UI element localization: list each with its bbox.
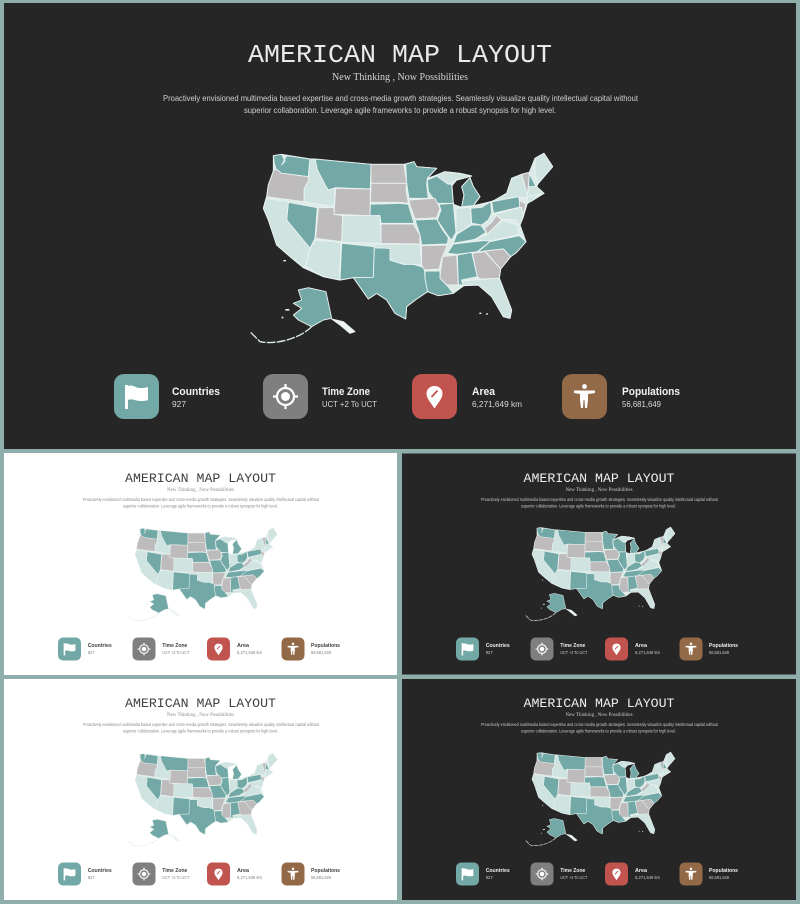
stat: time zone: UCT +2 To UCT <box>162 650 190 655</box>
stat: area: Area <box>237 643 250 649</box>
body text: superior collaboration. Leverage agile frameworks to provide a robust synopsis for high level. <box>123 504 278 508</box>
stat: countries: 927 <box>486 875 493 880</box>
stat: area <box>412 374 522 419</box>
stat: area: Area <box>237 868 250 874</box>
stat: time zone <box>530 862 588 886</box>
stat: area <box>207 862 262 886</box>
stat: time zone: Time Zone <box>162 868 187 874</box>
stat: time zone <box>132 862 190 886</box>
body text: Proactively envisioned multimedia based expertise and cross-media growth strategies. Seamlessly visualize quality intellectual capital without <box>163 93 639 103</box>
stat: populations <box>282 862 340 886</box>
stat: countries <box>58 638 112 660</box>
panel: dark slide top <box>402 454 796 674</box>
stat: area: 6,271,649 km <box>237 650 262 655</box>
subtitle: New Thinking , Now Possibilities <box>167 487 234 493</box>
stat: countries: Countries <box>172 386 220 398</box>
panel: white slide bottom <box>4 679 397 900</box>
body text <box>163 93 639 115</box>
stat: populations: 56,681,649 <box>709 650 730 655</box>
stat: populations: Populations <box>709 643 738 649</box>
stat: time zone: Time Zone <box>560 643 585 649</box>
subtitle: New Thinking , Now Possibilities <box>566 712 632 718</box>
stat: countries: Countries <box>88 868 112 874</box>
stat: populations <box>282 638 340 660</box>
map: United States <box>128 753 277 846</box>
stat: area: 6,271,649 km <box>635 875 660 880</box>
body text: Proactively envisioned multimedia based expertise and cross-media growth strategies. Seamlessly visualize quality intellectual capital without <box>481 497 719 502</box>
title: AMERICAN MAP LAYOUT <box>524 696 675 711</box>
subtitle: New Thinking , Now Possibilities <box>167 712 234 718</box>
body text: Proactively envisioned multimedia based expertise and cross-media growth strategies. Seamlessly visualize quality intellectual capital without <box>83 722 320 727</box>
title: AMERICAN MAP LAYOUT <box>125 471 276 486</box>
stat: countries: Countries <box>88 643 112 649</box>
stat: area <box>605 638 660 660</box>
stat: area: 6,271,649 km <box>237 875 262 880</box>
stat: populations: 56,681,649 <box>622 399 661 409</box>
panel: white slide top <box>4 453 397 675</box>
panel: dark slide bottom <box>402 679 796 900</box>
subtitle: New Thinking , Now Possibilities <box>566 487 632 493</box>
stat: area: Area <box>472 386 496 398</box>
stat: populations <box>680 638 738 660</box>
stat: populations: 56,681,649 <box>311 875 332 880</box>
stat: time zone: UCT +2 To UCT <box>560 875 588 880</box>
stat: countries: Countries <box>486 643 510 649</box>
stat: countries <box>58 862 112 886</box>
stat: populations: Populations <box>311 868 340 874</box>
panel: main dark slide <box>4 3 796 449</box>
stat: time zone <box>263 374 377 419</box>
stat: time zone: UCT +2 To UCT <box>560 650 588 655</box>
title: AMERICAN MAP LAYOUT <box>524 471 675 486</box>
stat: countries: 927 <box>486 650 493 655</box>
body text <box>83 722 320 734</box>
body text: superior collaboration. Leverage agile frameworks to provide a robust synopsis for high level. <box>123 728 278 734</box>
stat: area <box>207 638 262 660</box>
map: United States <box>525 752 675 846</box>
map: United States <box>250 153 553 343</box>
subtitle: New Thinking , Now Possibilities <box>332 72 468 83</box>
title: AMERICAN MAP LAYOUT <box>248 40 552 70</box>
stat: countries <box>456 638 510 660</box>
body text: superior collaboration. Leverage agile frameworks to provide a robust synopsis for high level. <box>521 728 676 734</box>
stat: populations <box>562 374 680 419</box>
stat: area: 6,271,649 km <box>635 650 660 655</box>
stat: countries: 927 <box>88 875 95 880</box>
body text <box>481 497 719 508</box>
body text <box>83 497 320 508</box>
stat: time zone: Time Zone <box>322 386 370 398</box>
stat: time zone <box>132 638 190 660</box>
stat: populations: 56,681,649 <box>709 875 730 880</box>
stat: countries: 927 <box>172 399 186 409</box>
body text: superior collaboration. Leverage agile frameworks to provide a robust synopsis for high level. <box>521 504 676 508</box>
body text <box>481 722 719 734</box>
stat: area <box>605 862 660 886</box>
body text: Proactively envisioned multimedia based expertise and cross-media growth strategies. Seamlessly visualize quality intellectual capital without <box>83 497 320 502</box>
stat: time zone <box>530 638 588 660</box>
map: United States <box>525 527 675 620</box>
stat: time zone: Time Zone <box>162 643 187 649</box>
stat: populations: Populations <box>709 868 738 874</box>
title: AMERICAN MAP LAYOUT <box>125 696 276 711</box>
stat: area: Area <box>635 868 648 874</box>
stat: time zone: UCT +2 To UCT <box>322 399 377 409</box>
stat: countries <box>114 374 220 419</box>
stat: populations <box>680 862 738 886</box>
stat: time zone: UCT +2 To UCT <box>162 875 190 880</box>
stat: area: 6,271,649 km <box>472 399 522 409</box>
stat: countries <box>456 862 510 886</box>
stat: time zone: Time Zone <box>560 868 585 874</box>
stat: countries: Countries <box>486 868 510 874</box>
stat: populations: Populations <box>622 386 680 398</box>
map: United States <box>128 528 277 621</box>
body text: Proactively envisioned multimedia based expertise and cross-media growth strategies. Seamlessly visualize quality intellectual capital without <box>481 722 719 727</box>
stat: populations: Populations <box>311 643 340 649</box>
stat: countries: 927 <box>88 650 95 655</box>
stat: populations: 56,681,649 <box>311 650 332 655</box>
body text: superior collaboration. Leverage agile frameworks to provide a robust synopsis for high level. <box>244 105 556 115</box>
stat: area: Area <box>635 643 648 649</box>
